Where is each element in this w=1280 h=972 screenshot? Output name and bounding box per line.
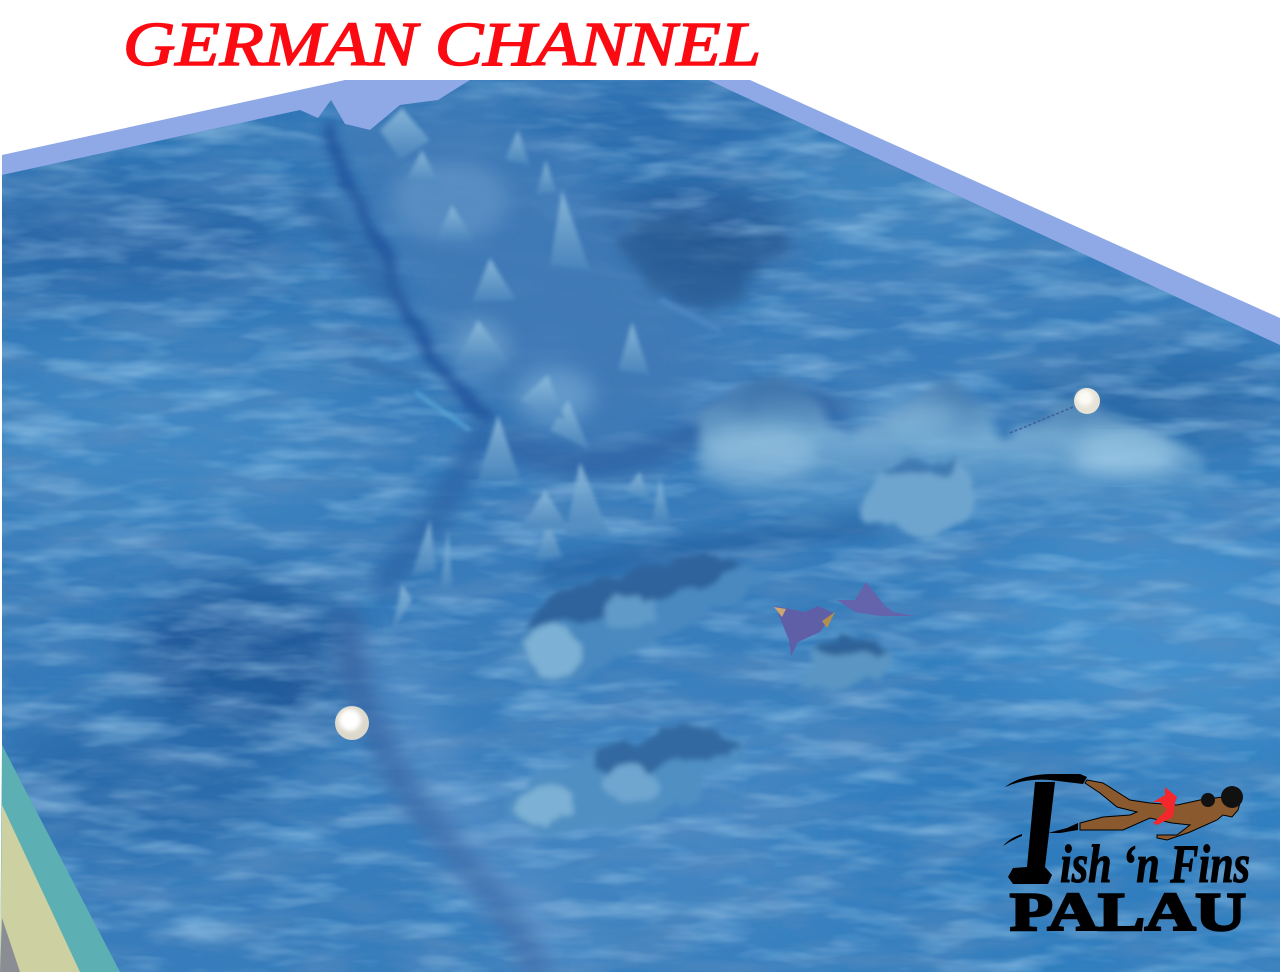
manta ray right	[837, 582, 915, 616]
logo: Fish 'n Fins Palau	[1003, 774, 1250, 942]
reef knoll: southern	[508, 722, 752, 838]
title: GERMAN CHANNEL	[123, 11, 761, 79]
model base edge: far side band	[2, 80, 1280, 350]
light eastern reef slope	[694, 373, 1208, 521]
icon: swimmer	[1003, 774, 1243, 846]
logo letter: stylised F	[1008, 782, 1055, 884]
reef knoll: beneath mantas	[798, 632, 894, 688]
channel trench	[300, 90, 880, 972]
marker: white buoy south-west	[335, 706, 369, 740]
manta ray left	[774, 606, 835, 656]
model base edge: near-left shore strip	[0, 745, 125, 972]
marker: white buoy north-east	[1010, 388, 1100, 433]
reef knoll: central east	[862, 456, 975, 535]
ridge spikes	[380, 108, 670, 632]
logo subtitle: PALAU	[1010, 882, 1246, 942]
reef knoll: mid ridge	[518, 552, 770, 680]
